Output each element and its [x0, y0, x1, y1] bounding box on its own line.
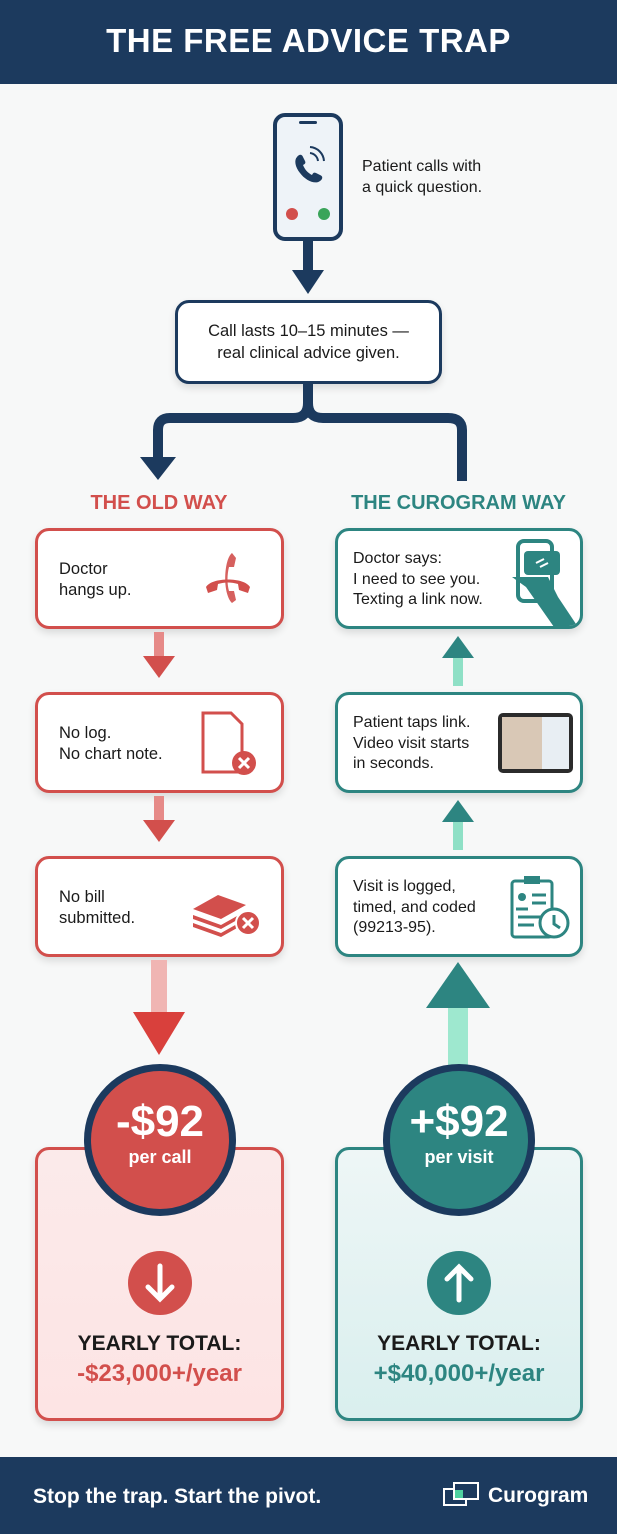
panel: visit logged [335, 856, 583, 957]
icon: hand with phone [512, 539, 576, 626]
icon: video tablet [498, 713, 573, 773]
heading: the old way: THE OLD WAY [90, 492, 228, 514]
yearly total curogram [374, 1332, 544, 1387]
text: patient calls: a quick question. [362, 179, 482, 196]
panel: no bill [35, 856, 284, 957]
yearly total old: YEARLY TOTAL: [78, 1332, 241, 1355]
arrow: down from phone [292, 241, 324, 294]
panel: no log: No chart note. [59, 745, 163, 763]
panel: visit logged: timed, and coded [353, 898, 476, 916]
badge: -$92: per call [128, 1147, 192, 1167]
arrow: big red down [133, 960, 185, 1055]
icon: hang up phone [206, 553, 250, 603]
panel: doctor says: Doctor says: [353, 550, 442, 567]
panel: visit logged: (99213-95). [353, 919, 436, 936]
heading: the curogram way: THE CUROGRAM WAY [351, 492, 566, 514]
panel: doctor hangs up: Doctor [59, 560, 108, 578]
panel: old way result [35, 1147, 284, 1421]
panel: no bill: submitted. [59, 909, 135, 927]
icon: down arrow circle [128, 1251, 192, 1315]
title: THE FREE ADVICE TRAP [106, 22, 511, 59]
icon: money x [193, 895, 259, 937]
footer tagline: Stop the trap. Start the pivot. [33, 1485, 321, 1508]
panel: no log [35, 692, 284, 793]
panel: doctor says: I need to see you. [353, 570, 480, 588]
arrow: big teal up [426, 962, 490, 1065]
yearly total curogram: +$40,000+/year [374, 1360, 544, 1387]
panel: doctor hangs up [35, 528, 284, 629]
panel: patient taps: Video visit starts [353, 734, 469, 752]
panel: patient taps: Patient taps link. [353, 714, 470, 731]
yearly total old [77, 1332, 242, 1387]
panel: doctor says [335, 528, 583, 629]
logo: curogram: Curogram [488, 1484, 588, 1507]
panel: no log: No log. [59, 724, 111, 742]
panel: doctor hangs up: hangs up. [59, 581, 131, 599]
icon: document x [202, 712, 256, 775]
header bar [0, 0, 617, 84]
panel: no bill: No bill [59, 888, 105, 906]
arrow: teal up 2 [442, 800, 474, 850]
badge: +$92: +$92 [409, 1097, 509, 1146]
icon: up arrow circle [427, 1251, 491, 1315]
arrow: red down 2 [143, 796, 175, 842]
icon: smartphone [273, 113, 343, 241]
box: call lasts: real clinical advice given. [217, 344, 400, 362]
box: call lasts [175, 300, 442, 384]
badge: +$92 [383, 1064, 535, 1216]
badge: -$92: -$92 [116, 1097, 204, 1146]
panel: doctor says: Texting a link now. [353, 591, 483, 608]
arrow: red down 1 [143, 632, 175, 678]
panel: visit logged: Visit is logged, [353, 878, 456, 895]
badge: +$92: per visit [424, 1147, 494, 1167]
panel: patient taps [335, 692, 583, 793]
text: patient calls [362, 158, 482, 196]
text: patient calls: Patient calls with [362, 158, 481, 175]
panel: curogram result [335, 1147, 583, 1421]
box: call lasts: Call lasts 10–15 minutes — [208, 322, 409, 340]
connector: branching arrows [140, 384, 467, 481]
panel: patient taps: in seconds. [353, 755, 434, 772]
icon: clipboard clock [510, 876, 570, 938]
yearly total curogram: YEARLY TOTAL: [377, 1332, 541, 1355]
yearly total old: -$23,000+/year [77, 1360, 242, 1387]
footer bar [0, 1457, 617, 1534]
arrow: teal up 1 [442, 636, 474, 686]
logo: curogram [443, 1482, 588, 1507]
badge: -$92 [84, 1064, 236, 1216]
